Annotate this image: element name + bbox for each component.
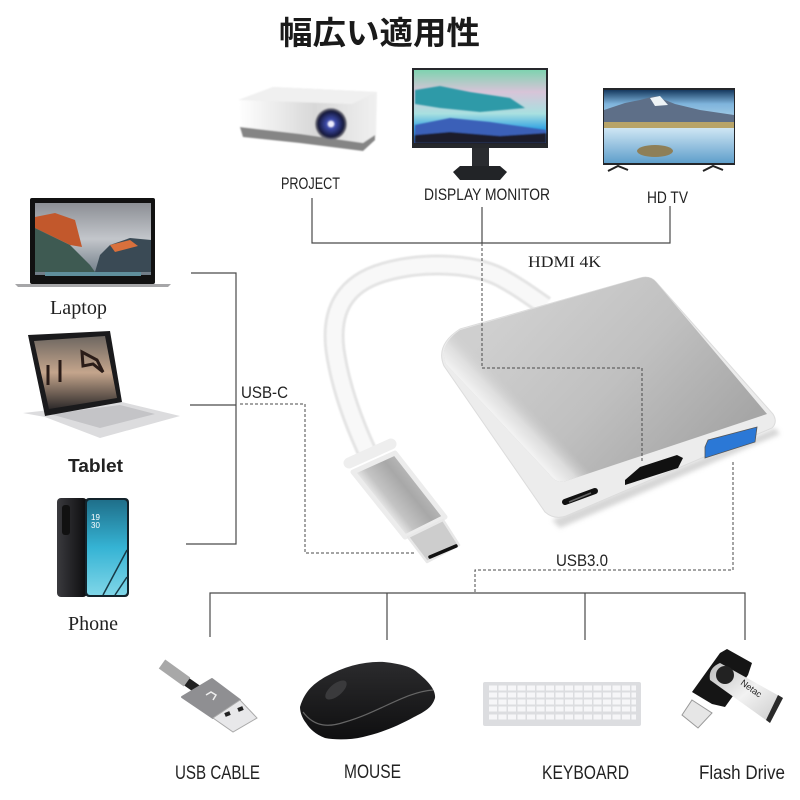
label: PROJECT: PROJECT: [281, 174, 340, 193]
label: MOUSE: MOUSE: [344, 762, 401, 783]
label: Laptop: Laptop: [50, 297, 107, 319]
connector: USB3.0 dotted line: [475, 462, 733, 592]
hub shadow: [552, 428, 780, 528]
label: KEYBOARD: KEYBOARD: [542, 763, 629, 784]
connector: USB devices bracket: [210, 593, 745, 640]
icon: display monitor: [412, 68, 548, 180]
icon: phone: 30: [91, 521, 100, 530]
icon: USB-C hub adapter: [334, 265, 780, 562]
icon: HD TV: [603, 88, 735, 171]
icon: laptop: [15, 198, 171, 287]
hub body: [442, 277, 775, 517]
plug barrel: [353, 453, 445, 537]
icon: USB cable: [162, 664, 257, 732]
icon: flash drive: [682, 649, 783, 728]
connector: USB-C bracket: [186, 273, 236, 544]
label: USB-C: USB-C: [241, 383, 288, 402]
label: Flash Drive: Flash Drive: [699, 763, 785, 784]
icon: tablet laptop: [23, 331, 180, 438]
icon: keyboard: [483, 682, 641, 726]
port: USB-C: [565, 491, 595, 502]
icon: phone: 19: [91, 513, 100, 522]
plug collar: [349, 444, 391, 463]
icon: phone: [57, 498, 129, 597]
hub left bevel: [444, 277, 767, 482]
icon: projector: [238, 87, 377, 151]
connector: HDMI dotted line: [482, 243, 642, 463]
plug tip: [408, 520, 459, 562]
label: USB CABLE: USB CABLE: [175, 763, 260, 784]
cable: [334, 265, 545, 458]
label: DISPLAY MONITOR: DISPLAY MONITOR: [424, 185, 550, 204]
port: HDMI: [625, 455, 683, 485]
label: Tablet: Tablet: [68, 456, 123, 476]
label: Phone: Phone: [68, 613, 118, 635]
icon: mouse: [300, 662, 435, 739]
connector: USB-C dotted line: [240, 404, 415, 553]
label: HDMI 4K: HDMI 4K: [528, 254, 601, 271]
title: 幅広い適用性: [279, 15, 480, 51]
connector: HDMI bracket: [312, 198, 670, 243]
port: USB 3.0: [705, 427, 757, 458]
hub top face: [444, 277, 767, 482]
icon: flash drive: Netac: [739, 678, 764, 700]
label: USB3.0: USB3.0: [556, 551, 608, 570]
label: HD TV: HD TV: [647, 188, 689, 207]
